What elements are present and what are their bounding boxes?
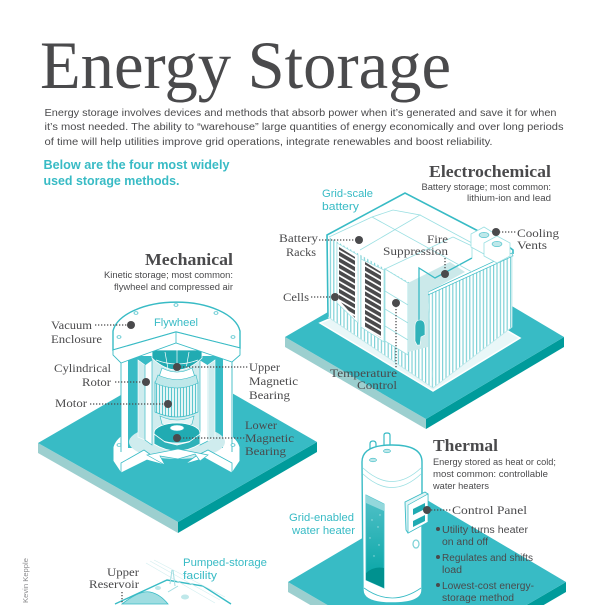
label: control panel (423, 503, 528, 517)
description: thermal: water heaters (432, 481, 490, 491)
panel: mechanical (38, 250, 317, 533)
label: battery racks: Racks (286, 245, 316, 259)
wall columns (121, 360, 232, 452)
label: cylindrical rotor: Cylindrical (54, 361, 112, 375)
bullet list: control panel benefits: Utility turns heater (442, 525, 529, 536)
right wall stripes (428, 253, 512, 388)
label: lower magnetic bearing (173, 418, 294, 458)
label: temperature control: Control (357, 378, 398, 392)
label: fire suppression: Fire (427, 232, 448, 246)
label: cooling vents (492, 226, 559, 252)
label: upper magnetic bearing: Magnetic (249, 374, 298, 388)
control panel (405, 492, 428, 533)
credit: Kevin Kepple (21, 558, 30, 603)
description: thermal: most common: controllable (433, 469, 548, 479)
label: lower magnetic bearing: Magnetic (245, 431, 294, 445)
label: grid-enabled water heater: Grid-enabled (289, 512, 354, 524)
label: upper magnetic bearing: Upper (249, 360, 280, 374)
platform: mechanical (38, 362, 317, 533)
label: motor (55, 396, 172, 410)
base wedge (121, 450, 165, 473)
roof grid (329, 210, 472, 272)
bullet list: control panel benefits: storage method (442, 593, 514, 604)
label: grid-scale battery: battery (322, 201, 360, 213)
description: mechanical: Kinetic storage; most common: (104, 270, 233, 280)
motor (155, 375, 198, 427)
battery building (327, 193, 513, 388)
label: motor: Motor (55, 396, 87, 410)
label: cylindrical rotor: Rotor (82, 375, 111, 389)
upper bearing (152, 346, 202, 380)
label: fire suppression: Suppression (383, 244, 448, 258)
label: grid-enabled water heater (289, 512, 355, 537)
callout: four methods (44, 158, 230, 188)
battery racks (339, 247, 355, 318)
label: upper magnetic bearing: Bearing (249, 388, 290, 402)
label: cooling vents: Vents (517, 238, 547, 252)
gauge (413, 540, 419, 548)
fire suppression recess (408, 262, 465, 352)
label: vacuum enclosure: Vacuum (51, 318, 93, 332)
label: temperature control: Temperature (330, 366, 397, 380)
label: lower magnetic bearing: Bearing (245, 444, 286, 458)
rack columns (337, 243, 358, 323)
label: pumped-storage facility: Pumped-storage (183, 557, 267, 569)
building outline (327, 193, 513, 317)
water window (366, 495, 384, 588)
label: upper magnetic bearing (173, 360, 298, 402)
lid bolts (117, 304, 235, 446)
intro text (44, 107, 564, 148)
label: cylindrical rotor (54, 361, 150, 389)
label: fire suppression (383, 232, 449, 278)
panel: pumped storage (89, 557, 267, 604)
fire suppression pipe (419, 258, 472, 322)
title: Energy Storage (40, 27, 451, 103)
bullet list: control panel benefits: Lowest-cost energy- (442, 581, 534, 592)
upper reservoir illustration (115, 560, 231, 604)
tank (362, 445, 422, 603)
description: electrochemical: Battery storage; most common: (422, 182, 551, 192)
intro text: Energy storage involves devices and methods that absorb power when it’s generated and save it for when (44, 107, 557, 119)
label: upper reservoir: Upper (107, 565, 139, 579)
callout: four methods: used storage methods. (44, 174, 180, 188)
label: cells: Cells (283, 290, 309, 304)
label: temperature control (330, 299, 400, 392)
intro text: of time will help utilities improve grid operations, integrate renewables and boost reliability. (44, 136, 492, 148)
cooling vents (471, 227, 510, 263)
description: mechanical: flywheel and compressed air (114, 282, 233, 292)
bullet list: control panel benefits: Regulates and shifts (442, 553, 533, 564)
description: thermal (432, 457, 556, 491)
lower bearing (154, 423, 200, 451)
inlet pipes (370, 441, 376, 461)
description: thermal: Energy stored as heat or cold; (433, 457, 556, 467)
enclosure lid (113, 302, 240, 350)
label: pumped-storage facility: facility (183, 570, 218, 582)
label: upper reservoir: Reservoir (89, 577, 139, 591)
label: vacuum enclosure (51, 318, 135, 346)
interior (121, 356, 233, 452)
bullet list: control panel benefits (436, 525, 534, 604)
description: electrochemical: lithium-ion and lead (467, 193, 551, 203)
label: vacuum enclosure: Enclosure (51, 332, 102, 346)
flywheel housing (113, 302, 240, 473)
label: battery racks: Battery (279, 231, 318, 245)
heading: thermal: Thermal (433, 436, 498, 455)
platform: electrochemical (285, 255, 564, 429)
base flange (113, 421, 240, 473)
label: lower magnetic bearing: Lower (245, 418, 277, 432)
label: grid-scale battery: Grid-scale (322, 188, 373, 200)
water heater (362, 433, 428, 603)
heading: electrochemical: Electrochemical (429, 162, 551, 181)
base plate (320, 280, 520, 391)
description: mechanical (104, 270, 233, 292)
intro text: it’s most needed. The ability to “warehouse” large quantities of energy economically and over long periods (44, 121, 564, 133)
left wall stripes (327, 236, 433, 388)
label: upper reservoir (89, 565, 139, 604)
temperature control box (385, 269, 408, 355)
bullet list: control panel benefits: on and off (442, 537, 488, 548)
label: control panel: Control Panel (452, 503, 528, 517)
label: grid-enabled water heater: water heater (291, 525, 355, 537)
description: electrochemical (422, 182, 551, 203)
label: pumped-storage facility (183, 557, 267, 582)
platform: thermal (288, 500, 566, 605)
heading: mechanical: Mechanical (145, 250, 233, 269)
bullet list: control panel benefits: load (442, 565, 462, 576)
label: cells (283, 290, 339, 304)
label: battery racks (279, 231, 363, 259)
callout: four methods: Below are the four most widely (44, 158, 230, 172)
label: grid-scale battery (322, 188, 373, 213)
label: flywheel: Flywheel (154, 317, 198, 329)
label: cooling vents: Cooling (517, 226, 559, 240)
panel: electrochemical (279, 162, 564, 429)
panel: thermal (288, 433, 566, 605)
